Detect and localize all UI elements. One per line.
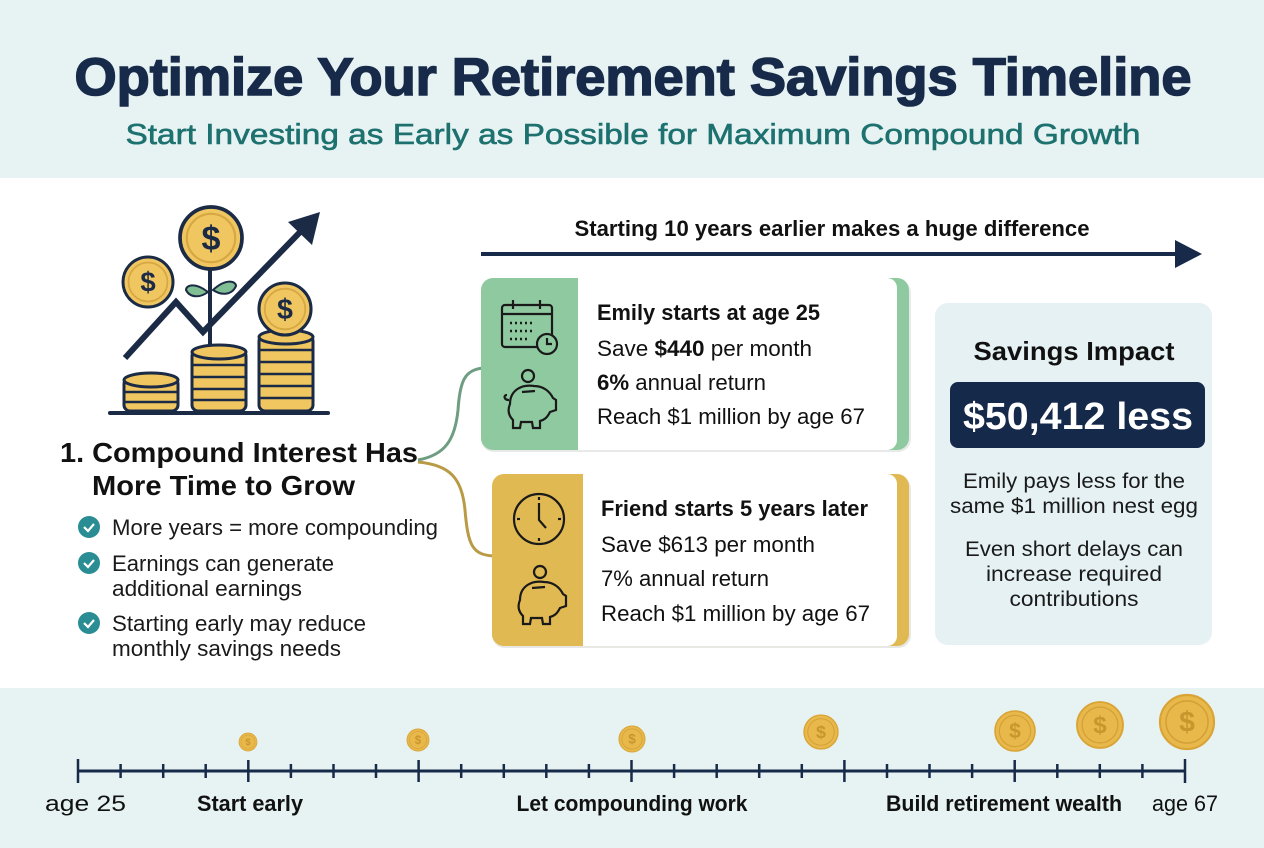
heading: compound interest: More Time to Grow xyxy=(92,470,355,501)
bullet list: Starting early may reduce xyxy=(112,611,366,636)
card: Emily: Reach $1 million by age 67 xyxy=(597,404,865,429)
icon: calendar xyxy=(502,300,557,354)
card: Friend xyxy=(492,474,911,648)
card: Emily: 6% annual return xyxy=(597,370,766,395)
panel: savings impact: Even short delays can xyxy=(965,538,1183,561)
panel: savings impact: Savings Impact xyxy=(974,336,1175,366)
timeline xyxy=(45,695,1218,816)
timeline: age 67 xyxy=(1152,791,1218,816)
icon: piggy bank xyxy=(519,566,566,624)
card: Friend: Reach $1 million by age 67 xyxy=(601,601,870,626)
panel: savings impact xyxy=(935,303,1212,645)
timeline: age 25 xyxy=(45,791,126,816)
icon: piggy bank xyxy=(505,370,556,428)
callout: amount xyxy=(950,382,1205,448)
card: Emily xyxy=(481,278,911,452)
arrow: timeline difference xyxy=(481,216,1202,268)
timeline: Build retirement wealth xyxy=(886,791,1122,816)
timeline band xyxy=(0,688,1264,848)
heading: compound interest xyxy=(60,437,418,501)
timeline: Start early xyxy=(197,791,304,816)
panel: savings impact: same $1 million nest egg xyxy=(950,495,1198,518)
panel: savings impact: contributions xyxy=(1010,588,1138,611)
bullet list: monthly savings needs xyxy=(112,636,341,661)
icon: coins growing xyxy=(239,695,1214,752)
title: Optimize Your Retirement Savings Timeline xyxy=(74,48,1192,107)
panel: savings impact: increase required xyxy=(986,563,1162,586)
bullet list: additional earnings xyxy=(112,576,302,601)
callout: amount: $50,412 less xyxy=(963,396,1193,438)
icon: coin stacks growth xyxy=(110,207,328,413)
heading: compound interest: 1. Compound Interest Has xyxy=(60,437,418,468)
header band xyxy=(0,0,1264,178)
connectors xyxy=(418,368,494,556)
bullet list: More years = more compounding xyxy=(112,515,438,540)
bullet list: Earnings can generate xyxy=(112,551,334,576)
card: Emily: Emily starts at age 25 xyxy=(597,300,820,325)
arrow: timeline difference: Starting 10 years earlier makes a huge difference xyxy=(574,216,1090,241)
timeline: Let compounding work xyxy=(516,791,748,816)
card: Friend: 7% annual return xyxy=(601,566,769,591)
bullet list xyxy=(78,515,438,661)
card: Emily: Save $440 per month xyxy=(597,336,812,361)
card: Friend: Friend starts 5 years later xyxy=(601,496,868,521)
icon: clock xyxy=(514,494,564,544)
panel: savings impact: Emily pays less for the xyxy=(963,470,1185,493)
card: Friend: Save $613 per month xyxy=(601,532,815,557)
subtitle: Start Investing as Early as Possible for Maximum Compound Growth xyxy=(126,119,1140,151)
